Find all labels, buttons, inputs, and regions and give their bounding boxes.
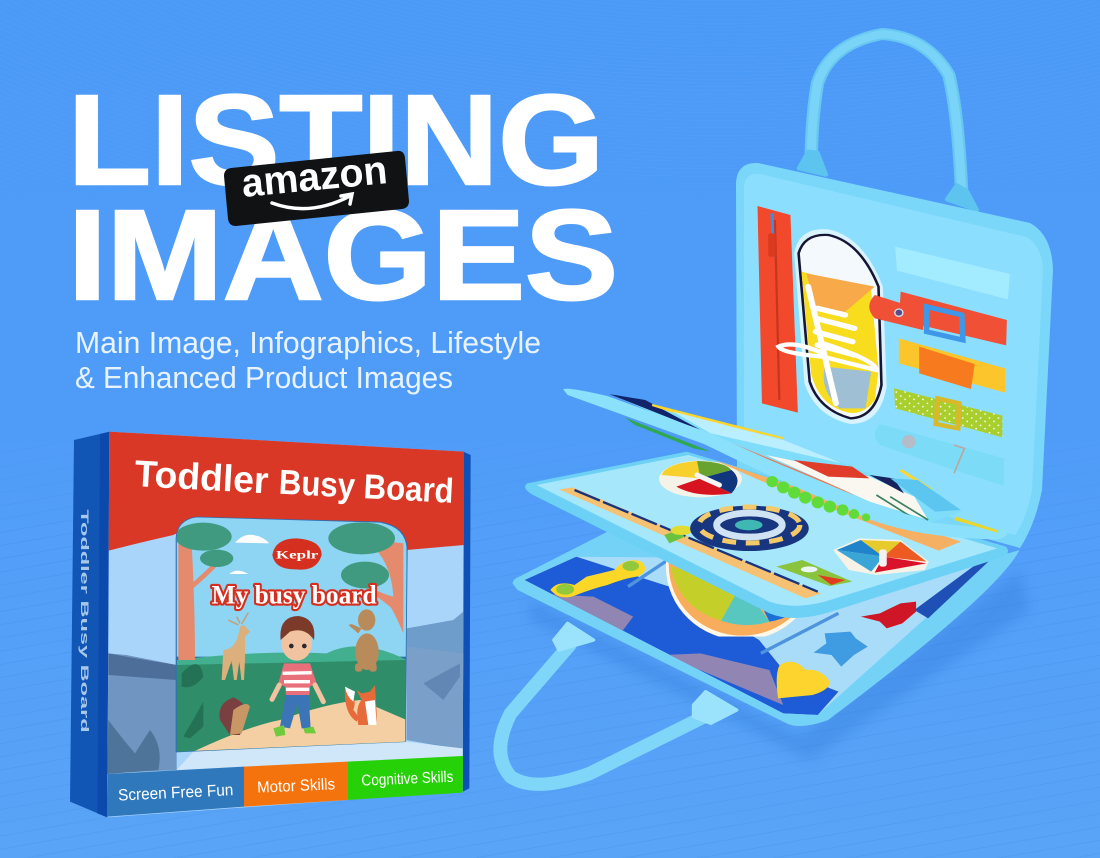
yellow dumbbell piece [550,560,645,597]
back panel [736,163,1053,548]
title line: IMAGES: IMAGES [68,184,618,327]
red shape [861,602,916,628]
lower strap handle [500,623,737,784]
bottom benefit bars [107,756,463,817]
title line: LISTING: LISTING [68,69,604,212]
subtitle line 2: & Enhanced Product Images [75,360,453,395]
box right edge [463,452,471,792]
middle activity page [525,452,1008,618]
illustration: hedgehog [219,697,250,735]
cover title: My busy board [212,580,377,609]
box title [134,452,455,511]
lower page base [512,530,1020,726]
illustration: deer [222,613,250,680]
flap art page [609,393,963,523]
brand blob [272,538,322,570]
busy board product [500,34,1053,784]
bar: cognitive skills: Cognitive Skills [361,769,454,790]
clock dial [690,506,809,551]
amazon smile [272,194,352,209]
amazon wordmark: amazon [240,148,389,206]
back panel activities [758,206,1010,437]
lower page artwork [524,557,990,715]
top carry handle [799,34,977,210]
clouds [235,535,269,543]
activity: yellow strap and clip [899,338,1005,393]
red header [109,432,464,551]
bar: screen free fun: Screen Free Fun [118,781,234,805]
yellow edge strip [954,517,997,533]
bar: screen free fun [107,767,244,817]
box front scene [107,432,464,817]
ground shadow [530,570,1030,760]
middle page base [525,452,1008,618]
activity: shoe laces [779,229,887,424]
matching strip [776,560,852,586]
activity: red belt and buckle [869,292,1007,345]
subtitle [75,325,541,395]
title [68,69,618,327]
colour spinner wheel [659,461,742,497]
activity: velcro strip [895,247,1010,299]
yellow heart [777,662,830,698]
cover path [193,700,407,752]
lower page wheel [666,562,796,637]
box title: Busy Board [278,464,455,511]
lower activity page [500,493,1020,784]
flap under-sliver [625,417,711,452]
green slider [664,526,693,543]
activity: green strap and slider [894,388,1002,437]
amazon badge [224,148,409,226]
spine text: Toddler Busy Board [78,509,90,733]
box spine [70,432,110,817]
trees [178,542,195,660]
snap strap [875,424,1004,486]
green bead rail [766,476,870,521]
brand blob: Keplr [276,549,318,561]
illustration: boy [272,616,323,737]
product box [70,432,471,817]
blue star [814,632,868,667]
illustration: fox [345,685,377,725]
subtitle line 1: Main Image, Infographics, Lifestyle [75,325,541,360]
octagon spinner [833,538,929,575]
bar: cognitive skills [347,756,463,800]
handle tabs [799,152,977,210]
bar: motor skills: Motor Skills [257,776,335,797]
bar: motor skills [244,762,347,807]
flap front lip [563,389,1007,539]
book cover [173,517,410,753]
box title: Toddler [134,452,270,501]
orange ruler strip [559,487,821,598]
illustration: bear [348,609,379,672]
top flap page [563,389,1007,539]
underside orange edge [714,460,961,551]
activity: zipper [758,206,798,413]
